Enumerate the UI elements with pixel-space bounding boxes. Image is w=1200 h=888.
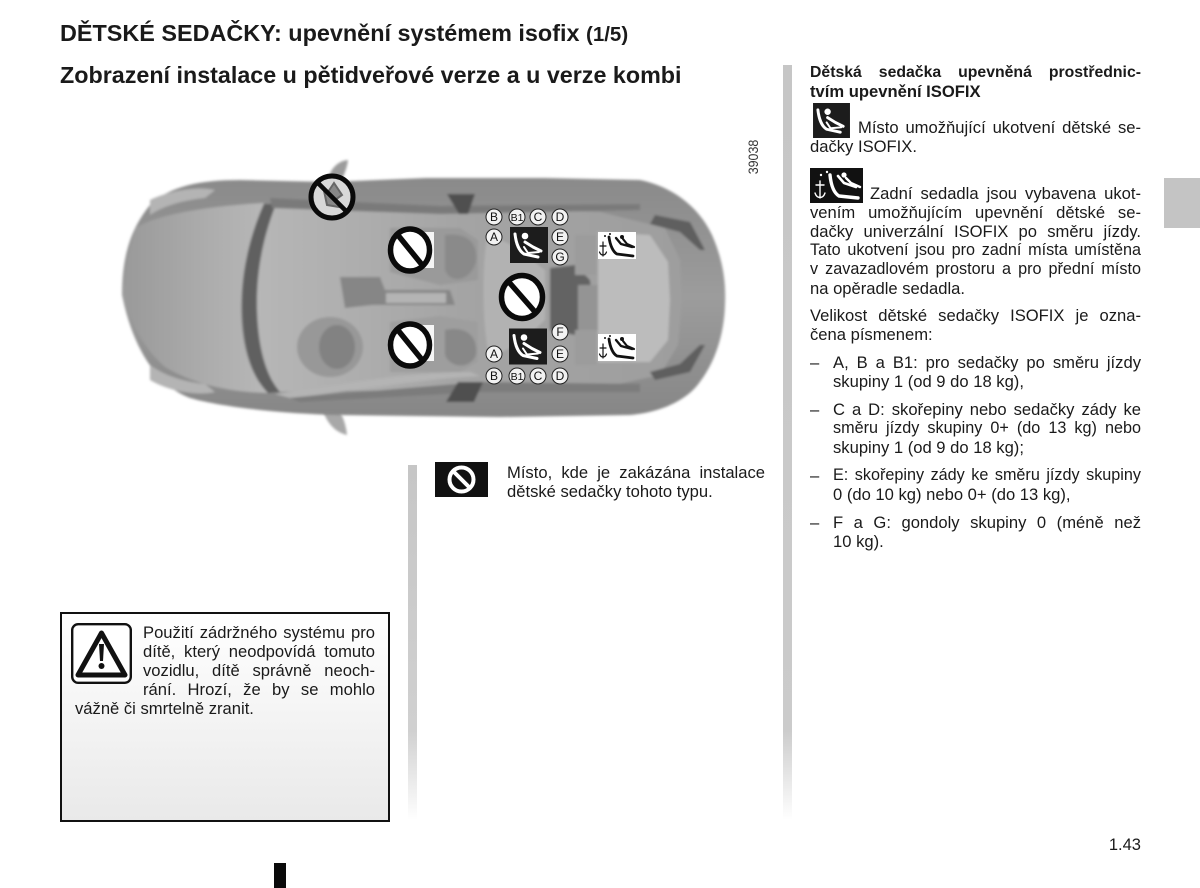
legend text bbox=[507, 463, 765, 501]
size letters: B bbox=[490, 369, 498, 383]
warning box bbox=[60, 612, 390, 822]
title: DĚTSKÉ SEDAČKY: upevnění systémem isofix (1/5) bbox=[60, 20, 628, 46]
size letters: E bbox=[556, 230, 564, 244]
size letters: B1 bbox=[511, 212, 524, 224]
warning text: Použití zádržného systému pro bbox=[143, 623, 375, 642]
text: rear seats: dačky univerzální ISOFIX po směru jízdy. bbox=[810, 222, 1141, 241]
list: seat sizes: A, B a B1: pro sedačky po směru jízdy bbox=[833, 353, 1141, 372]
windscreen pillars bbox=[242, 204, 280, 393]
right column heading bbox=[810, 64, 1141, 101]
warning text: vážně či smrtelně zranit. bbox=[75, 699, 254, 718]
list: seat sizes: F a G: gondoly skupiny 0 (méně než bbox=[833, 513, 1141, 532]
size letters: F bbox=[556, 325, 564, 339]
isofix icon bottom bbox=[509, 328, 547, 364]
warning text: dítě, který neodpovídá tomuto bbox=[143, 642, 375, 661]
text: isofix anchor place: dačky ISOFIX. bbox=[810, 137, 917, 156]
door sills bbox=[270, 198, 640, 214]
prohibited seat mirror sign bbox=[311, 176, 353, 218]
size letters: B1 bbox=[511, 371, 524, 383]
text: size intro: Velikost dětské sedačky ISOFIX je ozna- bbox=[810, 306, 1141, 325]
side bar: middle column bbox=[408, 465, 417, 820]
list: seat sizes: 0 (do 10 kg) nebo 0+ (do 13 kg), bbox=[833, 485, 1071, 504]
list: seat sizes: – bbox=[810, 353, 819, 372]
front seats bbox=[390, 228, 478, 285]
rear bench bbox=[484, 239, 545, 358]
list: seat sizes: – bbox=[810, 513, 819, 532]
list: seat sizes: skupiny 1 (od 9 do 18 kg); bbox=[833, 438, 1024, 457]
cargo floor bbox=[598, 232, 670, 362]
anchor icon top bbox=[598, 232, 636, 259]
page number: 1.43 bbox=[1109, 836, 1141, 854]
text: rear seats: Zadní sedadla jsou vybavena ukot- bbox=[870, 184, 1141, 203]
legend text: dětské sedačky tohoto typu. bbox=[507, 482, 713, 501]
car body shell bbox=[122, 178, 725, 417]
steering wheel area bbox=[297, 317, 363, 377]
centre console bbox=[340, 277, 455, 308]
B pillars bbox=[447, 194, 475, 214]
list: seat sizes bbox=[810, 353, 1141, 551]
mirrors bbox=[323, 160, 348, 435]
text: rear seats: na opěradle sedadla. bbox=[810, 279, 965, 298]
right column heading: tvím upevnění ISOFIX bbox=[810, 82, 981, 101]
text: size intro: čena písmenem: bbox=[810, 325, 933, 344]
list: seat sizes: 10 kg). bbox=[833, 532, 884, 551]
heading: installation view: Zobrazení instalace u pětidveřové verze a u verze kombi bbox=[60, 62, 682, 88]
side bar: right column bbox=[783, 65, 792, 820]
list: seat sizes: – bbox=[810, 400, 819, 419]
cabin bbox=[243, 204, 682, 392]
list: seat sizes: skupiny 1 (od 9 do 18 kg), bbox=[833, 372, 1024, 391]
car diagram bbox=[120, 158, 727, 436]
size letters: A bbox=[490, 347, 498, 361]
anchor icon bottom bbox=[598, 334, 636, 361]
figure code: 39038 bbox=[746, 140, 761, 174]
right column heading: Dětská sedačka upevněná prostřednic- bbox=[810, 64, 1141, 81]
headlights bbox=[150, 188, 215, 215]
size letters bbox=[486, 209, 568, 384]
dark rear quarter bbox=[650, 215, 705, 250]
icon: isofix seat bbox=[813, 103, 850, 138]
size letters: G bbox=[555, 250, 565, 264]
size letters: A bbox=[490, 230, 498, 244]
icon: warning triangle bbox=[71, 623, 132, 684]
text: rear seats: Tato ukotvení jsou pro zadní místa umístěna bbox=[810, 241, 1141, 259]
text: size intro bbox=[810, 306, 1141, 344]
warning text: vozidlu, dítě správně neoch- bbox=[143, 661, 375, 680]
list: seat sizes: C a D: skořepiny nebo sedačky zády ke bbox=[833, 400, 1141, 419]
text: isofix anchor place bbox=[810, 118, 1141, 156]
warning text bbox=[75, 623, 375, 718]
size letters: C bbox=[534, 210, 543, 224]
warning text: rání. Hrozí, že by se mohlo bbox=[143, 680, 375, 699]
text: rear seats: v zavazadlovém prostoru a pro přední místo bbox=[810, 260, 1141, 278]
text: isofix anchor place: Místo umožňující ukotvení dětské se- bbox=[858, 118, 1141, 137]
list: seat sizes: – bbox=[810, 466, 819, 485]
text: rear seats: vením umožňujícím upevnění dětské se- bbox=[810, 203, 1141, 222]
size letters: B bbox=[490, 210, 498, 224]
list: seat sizes: směru jízdy skupiny 0+ (do 13 kg) nebo bbox=[833, 419, 1141, 437]
crop mark bbox=[274, 863, 286, 888]
text: rear seats bbox=[810, 184, 1141, 298]
icon: rear seats anchor bbox=[810, 168, 863, 203]
no seat sign: front bottom bbox=[390, 324, 434, 366]
legend icon: prohibited bbox=[435, 462, 488, 497]
no seat sign: front top bbox=[390, 229, 434, 271]
hood bbox=[126, 203, 268, 393]
legend text: Místo, kde je zakázána instalace bbox=[507, 463, 765, 482]
isofix icon top bbox=[510, 227, 548, 263]
size letters: C bbox=[534, 369, 543, 383]
no seat sign: rear centre bbox=[502, 276, 542, 318]
size letters: D bbox=[556, 210, 565, 224]
size letters: E bbox=[556, 347, 564, 361]
list: seat sizes: E: skořepiny zády ke směru jízdy skupiny bbox=[833, 466, 1141, 484]
chapter tab bbox=[1164, 178, 1200, 228]
size letters: D bbox=[556, 369, 565, 383]
